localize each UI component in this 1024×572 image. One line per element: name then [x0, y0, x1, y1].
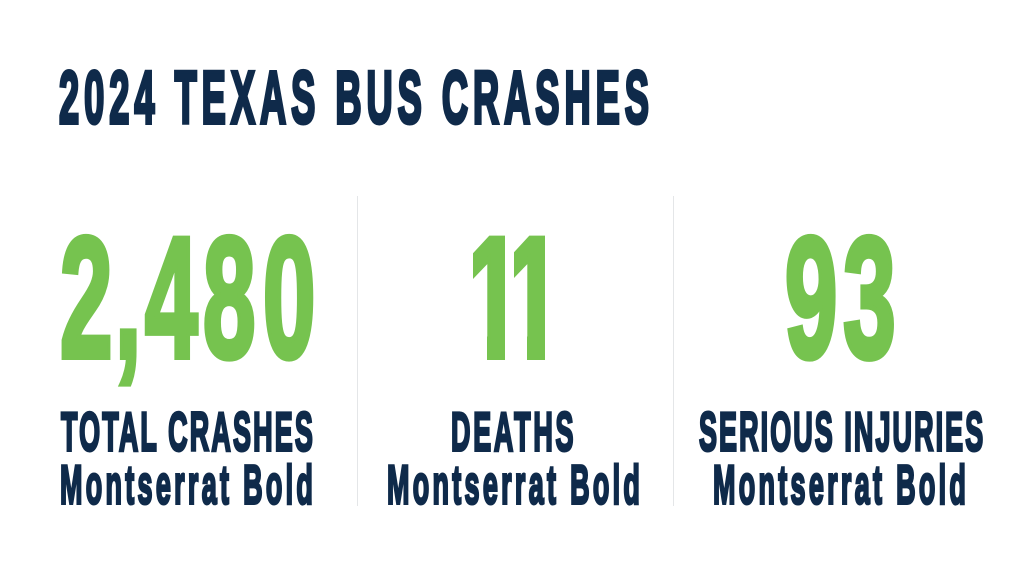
label: total crashes: TOTAL CRASHES [61, 402, 313, 463]
stat: 2,480: 2,480 [60, 202, 316, 394]
panel: deaths [388, 236, 639, 506]
stat: 93: 93 [785, 202, 896, 394]
label: font name: Montserrat Bold [713, 455, 966, 516]
label: serious injuries: SERIOUS INJURIES [699, 402, 983, 463]
label: deaths: DEATHS [451, 402, 574, 463]
infographic [59, 68, 983, 506]
title: 2024 TEXAS BUS CRASHES [59, 57, 649, 140]
label: font name: Montserrat Bold [387, 455, 640, 516]
panel: serious injuries [699, 202, 983, 516]
panel: total crashes [60, 202, 316, 516]
label: font name: Montserrat Bold [60, 455, 313, 516]
stat: 11: 11 [465, 203, 562, 395]
